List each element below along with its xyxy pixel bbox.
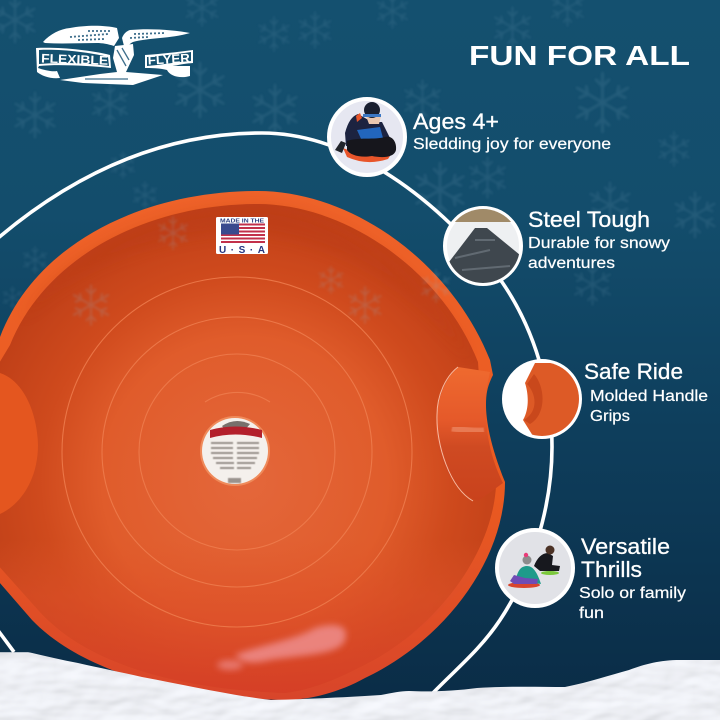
photo: child on sled [329, 99, 405, 175]
lower red tone [4, 571, 463, 693]
concentric ridges [62, 277, 412, 627]
feature: Steel Tough [445, 207, 670, 290]
eagle body and base [60, 44, 163, 85]
connecting ring [0, 133, 552, 695]
snow foreground [0, 652, 720, 720]
ages description: Sledding joy for everyone [413, 136, 611, 153]
versatile description [579, 585, 686, 622]
photo: two sledders [497, 530, 573, 606]
center label [200, 416, 270, 486]
feature: Ages 4+ [329, 99, 611, 175]
versatile description: fun [579, 605, 604, 622]
steel description: adventures [528, 255, 615, 272]
feature: Safe Ride [504, 359, 708, 437]
right banner [145, 50, 193, 77]
left banner [36, 48, 111, 78]
safe description: Grips [590, 408, 630, 425]
sled [0, 191, 505, 700]
snowflakes on sled [74, 217, 450, 325]
made in the USA sticker [216, 217, 268, 256]
logo: Flexible Flyer [36, 26, 193, 85]
made in the USA sticker: MADE IN THE [220, 219, 265, 225]
flag [221, 224, 265, 244]
right handle [436, 367, 503, 501]
basin shadow top [20, 208, 470, 360]
sled rim [0, 191, 505, 700]
left handle [0, 373, 38, 514]
steel heading: Steel Tough [528, 207, 650, 232]
feature: Versatile Thrills [497, 530, 686, 622]
eagle right wing [122, 29, 190, 50]
steel description: Durable for snowy [528, 235, 670, 252]
ages heading: Ages 4+ [413, 109, 499, 134]
logo: Flexible Flyer: FLYER [147, 51, 190, 67]
photo: molded grip [504, 361, 585, 437]
highlight reflection [235, 625, 346, 662]
photo: snowy track [445, 208, 521, 290]
safe description [590, 388, 708, 425]
title: FUN FOR ALL [469, 40, 690, 71]
safe heading: Safe Ride [584, 359, 683, 384]
versatile description: Solo or family [579, 585, 686, 602]
logo wordmark: FLEXIBLE [41, 52, 108, 68]
safe description: Molded Handle [590, 388, 708, 405]
made in the USA sticker: U·S·A [219, 245, 265, 256]
versatile heading: Thrills [581, 557, 642, 582]
versatile heading: Versatile [581, 534, 670, 559]
steel description [528, 235, 670, 272]
versatile heading [581, 534, 670, 582]
sled basin [0, 204, 496, 693]
background snowflakes [0, 0, 714, 309]
eagle left wing [43, 26, 119, 46]
